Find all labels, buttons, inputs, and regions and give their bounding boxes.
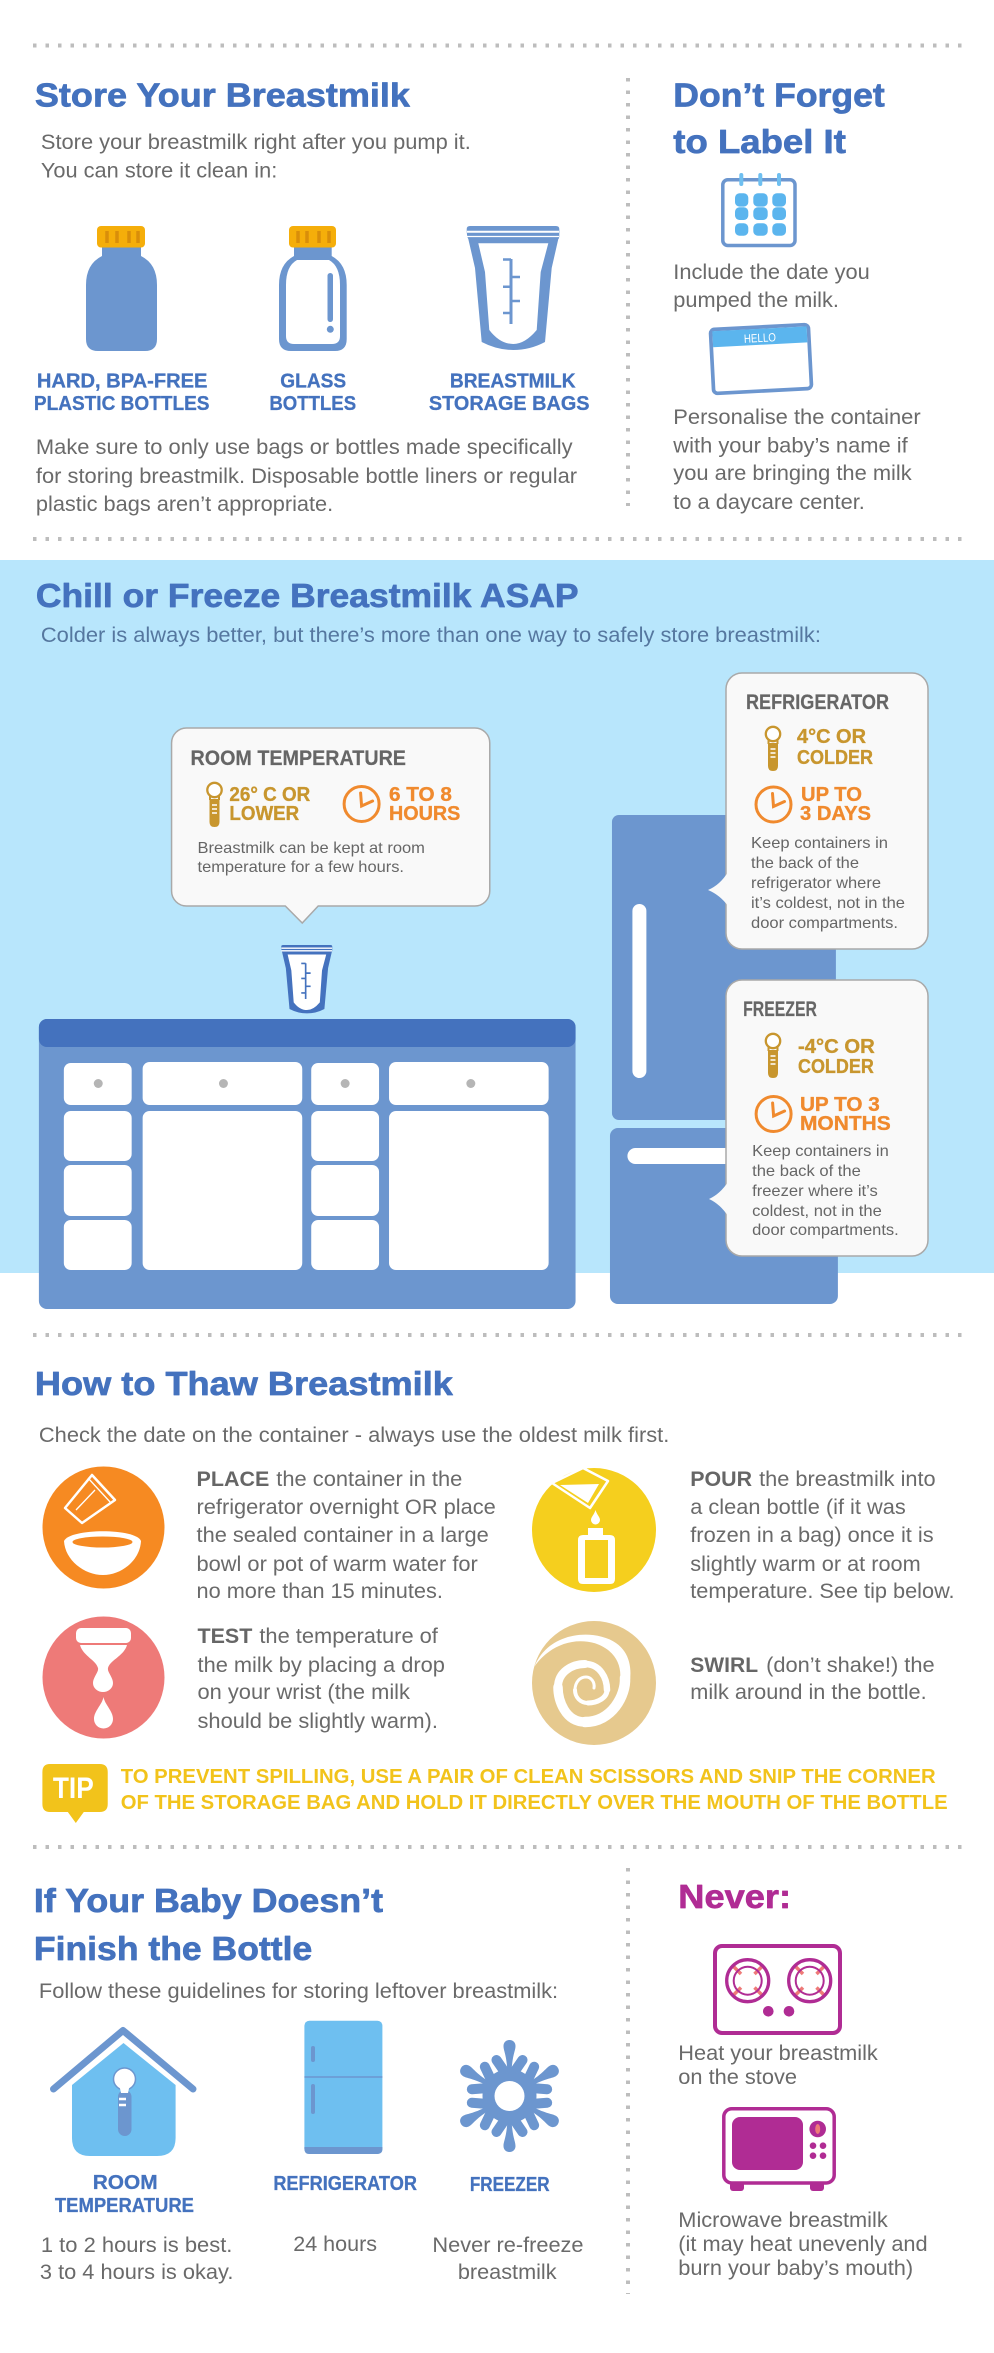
- callout: room temperature: [172, 728, 490, 923]
- text: room temperature duration: 3 to 4 hours is okay.: [40, 2261, 233, 2284]
- label: room temperature: ROOM: [93, 2172, 158, 2194]
- icon: clock: [344, 786, 379, 822]
- heading: how to thaw: How to Thaw Breastmilk: [35, 1365, 454, 1402]
- icon: clock: [756, 787, 791, 822]
- icon: clock: [756, 1096, 791, 1132]
- icon: refrigerator: [304, 2021, 382, 2154]
- callout: refrigerator: COLDER: [797, 747, 873, 769]
- step: place: [197, 1468, 496, 1603]
- panel: leftover breastmilk: [34, 1882, 584, 2284]
- callout: refrigerator: 3 DAYS: [800, 803, 871, 825]
- callout: room temperature: ROOM TEMPERATURE: [191, 747, 406, 770]
- label: refrigerator: REFRIGERATOR: [273, 2173, 417, 2195]
- icon: calendar: [723, 175, 795, 246]
- text: use proper containers: plastic bags aren’t appropriate.: [36, 493, 333, 516]
- callout: refrigerator: UP TO: [801, 784, 862, 806]
- callout: freezer: the back of the: [752, 1163, 861, 1180]
- text: room temperature duration: [40, 2234, 233, 2284]
- text: include the date: Include the date you: [673, 261, 870, 284]
- intro text: check the date: Check the date on the container - always use the oldest milk first.: [39, 1424, 669, 1447]
- heading: if your baby doesn't finish: Finish the Bottle: [34, 1930, 312, 1967]
- text: microwave warning: [678, 2209, 928, 2280]
- step: place: the container in the: [276, 1468, 462, 1491]
- callout: freezer: COLDER: [798, 1056, 874, 1078]
- step: swirl: [690, 1654, 935, 1704]
- illustration: kitchen counter: [39, 1019, 576, 1309]
- label: glass bottles: [269, 370, 356, 415]
- panel: how to thaw: [35, 1365, 955, 1823]
- icon: plastic bottle: [86, 226, 157, 351]
- icon: storage bag: [467, 226, 559, 350]
- label: room temperature: [55, 2172, 194, 2217]
- step: place: no more than 15 minutes.: [197, 1580, 443, 1603]
- text: use proper containers: [36, 436, 577, 516]
- label: glass bottles: BOTTLES: [269, 393, 356, 415]
- text: microwave warning: Microwave breastmilk: [678, 2209, 888, 2232]
- step: test: on your wrist (the milk: [198, 1681, 411, 1704]
- icon: thermometer: [766, 1034, 780, 1078]
- text: freezer guidance: [432, 2234, 584, 2284]
- step: place: bowl or pot of warm water for: [197, 1553, 478, 1576]
- icon: snowflake: [455, 2040, 564, 2152]
- step: pour: slightly warm or at room: [690, 1553, 921, 1576]
- icon: glass bottle: [279, 226, 347, 351]
- step: test: the milk by placing a drop: [198, 1654, 445, 1677]
- step: pour: POUR: [690, 1468, 752, 1491]
- callout: freezer: FREEZER: [743, 998, 817, 1021]
- callout: refrigerator: refrigerator where: [751, 875, 881, 892]
- panel: never: [678, 1878, 928, 2280]
- icon: house with thermometer: [54, 2030, 193, 2156]
- text: heat on stove: Heat your breastmilk: [678, 2042, 878, 2065]
- step: pour: temperature. See tip below.: [690, 1580, 955, 1603]
- text: microwave warning: burn your baby’s mouth): [678, 2257, 913, 2280]
- text: use proper containers: Make sure to only use bags or bottles made specifically: [36, 436, 573, 459]
- callout: tip: TO PREVENT SPILLING, USE A PAIR OF CLEAN SCISSORS AND SNIP THE CORNER: [121, 1766, 936, 1788]
- step: test: should be slightly warm).: [198, 1710, 438, 1733]
- icon: swirl: [532, 1621, 656, 1745]
- icon: microwave: [724, 2109, 834, 2191]
- label: freezer: FREEZER: [470, 2174, 550, 2196]
- callout: refrigerator: door compartments.: [751, 915, 898, 932]
- icon: tip bubble: [42, 1764, 108, 1823]
- callout: freezer: coldest, not in the: [752, 1203, 882, 1220]
- label: plastic bottles: HARD, BPA-FREE: [37, 370, 207, 393]
- label: room temperature: TEMPERATURE: [55, 2195, 194, 2217]
- text: personalise the container: with your baby’s name if: [672, 434, 908, 458]
- step: pour: frozen in a bag) once it is: [690, 1524, 934, 1547]
- panel: store your breastmilk: [34, 76, 590, 516]
- callout: freezer: Keep containers in: [752, 1143, 889, 1160]
- intro text: follow guidelines: Follow these guidelines for storing leftover breastmilk:: [39, 1980, 558, 2003]
- callout: room temperature: 26° C OR: [229, 784, 311, 806]
- icon: tip bubble: TIP: [53, 1772, 94, 1805]
- callout: freezer: MONTHS: [800, 1113, 891, 1135]
- callout: refrigerator: REFRIGERATOR: [746, 691, 889, 714]
- step: place: the sealed container in a large: [197, 1524, 489, 1547]
- callout: freezer: UP TO 3: [800, 1094, 880, 1116]
- icon: stove: [715, 1946, 840, 2033]
- callout: freezer: -4°C OR: [798, 1036, 875, 1058]
- panel: don't forget to label it: [672, 76, 921, 514]
- icon: thermometer: [207, 783, 222, 827]
- heading: store your breastmilk: Store Your Breastmilk: [35, 76, 411, 114]
- callout: room temperature: Breastmilk can be kept at room: [198, 840, 425, 857]
- text: microwave warning: (it may heat unevenly and: [678, 2233, 928, 2256]
- callout: refrigerator: the back of the: [751, 855, 859, 872]
- text: include the date: pumped the milk.: [673, 289, 839, 312]
- icon: thermometer: [766, 727, 780, 771]
- text: personalise the container: [672, 406, 921, 514]
- heading: don't forget to label it: [673, 76, 885, 160]
- heading: don't forget to label it: to Label It: [673, 123, 846, 160]
- label: storage bags: [429, 370, 590, 415]
- text: room temperature duration: 1 to 2 hours is best.: [41, 2234, 232, 2257]
- intro text: colder is better: Colder is always better, but there’s more than one way to safely store breastmilk:: [41, 624, 821, 647]
- label: glass bottles: GLASS: [280, 370, 346, 393]
- text: include the date: [673, 261, 870, 312]
- icon: name tag: HELLO: [744, 330, 776, 346]
- icon: pouring into bottle: [532, 1468, 656, 1592]
- intro text: [41, 131, 471, 183]
- callout: room temperature: 6 TO 8: [389, 784, 452, 806]
- callout: freezer: freezer where it’s: [752, 1183, 878, 1200]
- step: test: TEST: [198, 1625, 253, 1648]
- icon: bag over bowl: [42, 1466, 164, 1588]
- label: plastic bottles: [34, 370, 209, 415]
- step: place: PLACE: [197, 1468, 269, 1491]
- text: heat on stove: [678, 2042, 878, 2089]
- text: personalise the container: you are bringing the milk: [673, 462, 912, 485]
- label: storage bags: STORAGE BAGS: [429, 393, 590, 415]
- text: use proper containers: for storing breastmilk. Disposable bottle liners or regular: [36, 465, 577, 488]
- step: pour: [690, 1468, 955, 1603]
- text: personalise the container: to a daycare center.: [673, 491, 865, 514]
- callout: refrigerator: [708, 673, 928, 949]
- illustration: fridge: [610, 815, 838, 1304]
- text: refrigerator duration: 24 hours: [293, 2233, 377, 2256]
- callout: refrigerator: Keep containers in: [751, 835, 888, 852]
- intro text: You can store it clean in:: [41, 159, 277, 183]
- icon: name tag: [710, 324, 812, 394]
- callout: tip: OF THE STORAGE BAG AND HOLD IT DIRECTLY OVER THE MOUTH OF THE BOTTLE: [121, 1792, 948, 1814]
- heading: never: Never:: [678, 1878, 791, 1915]
- step: test: [198, 1625, 445, 1733]
- callout: room temperature: temperature for a few hours.: [198, 859, 404, 876]
- callout: room temperature: HOURS: [389, 803, 460, 825]
- step: swirl: milk around in the bottle.: [690, 1681, 927, 1704]
- text: heat on stove: on the stove: [678, 2066, 797, 2089]
- step: pour: the breastmilk into: [759, 1468, 936, 1491]
- icon: nipple and drop: [42, 1616, 164, 1738]
- heading: if your baby doesn't finish: If Your Baby Doesn’t: [34, 1882, 383, 1919]
- callout: refrigerator: it’s coldest, not in the: [751, 895, 905, 912]
- text: personalise the container: Personalise the container: [673, 406, 921, 429]
- panel: chill or freeze: [0, 560, 994, 1309]
- callout: freezer: [709, 980, 928, 1256]
- callout: freezer: door compartments.: [752, 1222, 899, 1239]
- step: pour: a clean bottle (if it was: [690, 1496, 906, 1519]
- label: storage bags: BREASTMILK: [450, 370, 576, 393]
- text: freezer guidance: breastmilk: [458, 2261, 557, 2284]
- heading: chill or freeze: Chill or Freeze Breastmilk ASAP: [36, 577, 579, 614]
- heading: don't forget to label it: Don’t Forget: [673, 76, 885, 114]
- intro text: Store your breastmilk right after you pump it.: [41, 131, 471, 154]
- step: swirl: SWIRL: [690, 1654, 758, 1677]
- icon: small storage bag: [281, 945, 332, 1013]
- callout: tip: [42, 1764, 948, 1823]
- step: swirl: (don’t shake!) the: [766, 1654, 935, 1677]
- label: plastic bottles: PLASTIC BOTTLES: [34, 393, 209, 415]
- heading: if your baby doesn't finish: [34, 1882, 383, 1967]
- step: place: refrigerator overnight OR place: [197, 1496, 496, 1519]
- step: test: the temperature of: [259, 1625, 438, 1648]
- callout: room temperature: LOWER: [229, 803, 300, 825]
- callout: refrigerator: 4°C OR: [797, 726, 867, 748]
- text: freezer guidance: Never re-freeze: [432, 2234, 584, 2257]
